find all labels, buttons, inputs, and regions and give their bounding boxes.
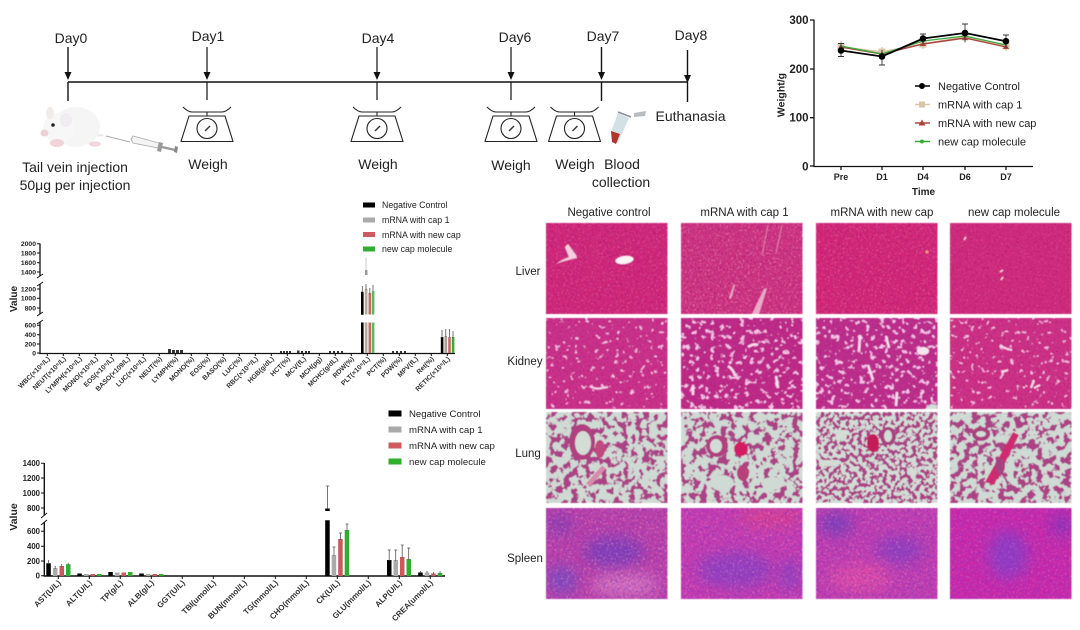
x tick labels: GLU(mmol/L): [331, 578, 373, 621]
legend: biochemistry: Negative Control: [409, 409, 480, 420]
y tick labels: [23, 459, 41, 580]
y tick labels: 400: [25, 332, 36, 339]
x tick labels: CREA(umol/L): [390, 578, 435, 623]
y tick labels: 200: [25, 342, 36, 348]
column headings: Negative control: [567, 207, 651, 219]
weight y tick labels: [789, 15, 808, 174]
y tick labels: 1600: [21, 260, 36, 267]
label: Weigh Day1: Weigh: [188, 156, 228, 172]
x tick labels: LUC(%): [222, 356, 244, 378]
micrograph: liver mRNA with cap 1: [681, 223, 802, 314]
micrograph: kidney negative control: [546, 318, 668, 409]
timeline axis: [68, 81, 688, 83]
row labels: Spleen: [507, 553, 543, 565]
marker: Day8: [675, 27, 708, 102]
y tick labels: 0: [36, 572, 41, 580]
y axis title: Value: [9, 286, 20, 312]
x tick labels: MCV(fL): [284, 356, 308, 379]
label: blood collection: Blood: [604, 156, 640, 172]
bars: small values: [168, 349, 406, 353]
row labels: Lung: [515, 448, 541, 460]
x tick labels: LYMPH(×10⁹/L): [45, 356, 84, 395]
weight x tick labels: Pre: [834, 172, 848, 182]
legend: blood routine: Negative Control: [382, 200, 448, 210]
weight axes: [810, 20, 1033, 170]
row labels: Kidney: [507, 356, 543, 368]
weight x tick labels: D7: [1000, 172, 1012, 182]
weight y tick labels: 0: [802, 162, 808, 174]
marker: Day4: [362, 30, 395, 100]
micrograph: liver negative control: [546, 223, 668, 314]
x tick labels: BUN(mmol/L): [206, 578, 249, 621]
legend: biochemistry: new cap molecule: [409, 457, 486, 468]
bars: green series: [66, 530, 442, 576]
marker: Day6: Day6: [499, 29, 532, 45]
x tick labels: PLT(×10⁹/L): [340, 356, 372, 387]
legend: weight chart: mRNA with new cap: [938, 118, 1036, 130]
weight x tick labels: [834, 172, 1012, 182]
x tick labels: MPV(fL): [397, 356, 420, 379]
micrograph: lung mRNA with new cap: [816, 412, 938, 503]
x tick labels: BASO(×109/L): [95, 356, 132, 393]
axis ticks: [41, 463, 430, 579]
x tick labels: HCT(%): [270, 356, 292, 378]
legend: weight chart: new cap molecule: [938, 136, 1026, 148]
x tick labels: LYMPH(%): [151, 356, 180, 385]
micrograph: liver mRNA with new cap: [816, 223, 938, 314]
y tick labels: 1000: [23, 489, 41, 498]
x tick labels: TG(mmol/L): [242, 578, 280, 617]
marker: Day0: [55, 30, 88, 101]
axes: [44, 463, 445, 576]
chart: blood biochemistry bar chart: [8, 409, 495, 623]
y tick labels: 600: [27, 527, 41, 536]
panel: experiment timeline: [20, 27, 726, 193]
bars: PLT: [361, 258, 374, 353]
legend: weight chart: [915, 81, 1036, 148]
micrograph: kidney mRNA with new cap: [816, 318, 938, 409]
marker: Day1: [192, 28, 225, 100]
y tick labels: 400: [27, 542, 41, 551]
series: mRNA with cap 1: [838, 31, 1010, 58]
axes: [40, 244, 455, 354]
y tick labels: 1400: [21, 270, 36, 276]
column headings: mRNA with cap 1: [700, 207, 789, 219]
text: injection details: 50μg per injection: [20, 177, 130, 193]
y tick labels: 600: [25, 323, 36, 330]
bars: RETIC: [441, 329, 454, 353]
weight y tick labels: 100: [789, 113, 808, 125]
micrograph: spleen mRNA with cap 1: [681, 508, 802, 599]
x tick labels: MCHC(g/dL): [307, 356, 340, 389]
micrograph: spleen new cap molecule: [950, 508, 1074, 599]
weight x tick labels: D4: [917, 172, 929, 182]
legend: biochemistry: mRNA with new cap: [409, 441, 495, 452]
y tick labels: 1000: [21, 296, 36, 303]
chart: blood routine bar chart: [9, 200, 461, 395]
micrograph: kidney new cap molecule: [950, 318, 1072, 409]
label: blood collection: collection: [592, 174, 650, 190]
micrograph: liver new cap molecule: [950, 223, 1072, 314]
text: injection details: [20, 159, 130, 193]
x tick labels: ALT(U/L): [64, 578, 94, 608]
x tick labels: TBI(umol/L): [180, 578, 218, 616]
legend: weight chart: mRNA with cap 1: [938, 100, 1022, 112]
icon: scale Day7: [548, 107, 600, 142]
x tick labels: BASO(%): [202, 356, 228, 382]
x tick labels: MONO(×10⁹/L): [62, 356, 100, 394]
x tick labels: ALP(U/L): [373, 578, 404, 609]
weight x tick labels: D6: [959, 172, 971, 182]
text: injection details: Tail vein injection: [22, 159, 128, 175]
weight y tick labels: 200: [789, 64, 808, 76]
legend: blood routine: [363, 200, 461, 254]
micrograph: spleen negative control: [546, 508, 668, 599]
micrographs: [546, 223, 1074, 599]
x tick labels: PCT(%): [366, 356, 388, 378]
marker: Day4: Day4: [362, 30, 395, 46]
x tick labels: MONO(%): [168, 356, 196, 383]
x tick labels: NEUT(%): [138, 356, 164, 381]
column headings: mRNA with new cap: [831, 207, 933, 219]
x tick labels: TP(g/L): [99, 578, 125, 604]
bars: gray series: [53, 555, 429, 576]
weight y tick labels: 300: [789, 15, 808, 27]
panel: histology grid: [507, 207, 1074, 599]
marker: Day0: Day0: [55, 30, 88, 46]
series: Negative Control: [838, 24, 1009, 65]
y tick labels: 1200: [21, 286, 36, 294]
chart: body weight line chart: [776, 15, 1036, 198]
label: euthanasia: Euthanasia: [656, 108, 726, 124]
legend: blood routine: mRNA with cap 1: [382, 215, 450, 225]
x tick labels: ALB(g/L): [126, 578, 156, 609]
micrograph: kidney mRNA with cap 1: [681, 318, 802, 409]
column headings: [567, 207, 1060, 219]
y tick labels: [21, 241, 36, 358]
icon: scale Day4: [351, 107, 403, 142]
x tick labels: [17, 356, 452, 395]
legend: biochemistry: mRNA with cap 1: [409, 425, 483, 436]
marker: Day1: Day1: [192, 28, 225, 44]
y tick labels: 1400: [23, 459, 41, 468]
series: new cap molecule: [841, 36, 1006, 54]
column headings: new cap molecule: [968, 207, 1060, 219]
error bars: [48, 486, 440, 574]
micrograph: lung new cap molecule: [950, 412, 1072, 503]
icon: blood tube: [611, 111, 646, 144]
legend: weight chart: Negative Control: [938, 81, 1020, 93]
row labels: [507, 266, 543, 565]
x tick labels: EOS(%): [189, 356, 212, 378]
x tick labels: CHO(mmol/L): [268, 578, 311, 621]
legend: blood routine: new cap molecule: [382, 244, 453, 254]
x tick labels: NEUT(×10⁹/L): [32, 356, 68, 392]
x tick labels: Ret(%): [416, 356, 436, 376]
label: Weigh Day4: Weigh: [358, 156, 398, 172]
x tick labels: RETIC(×10⁹/L): [415, 356, 452, 393]
marker: Day8: Day8: [675, 27, 708, 43]
icon: scale Day6: [485, 107, 537, 142]
micrograph: spleen mRNA with new cap: [816, 508, 938, 599]
icon: mouse: [40, 107, 103, 147]
weight x tick labels: D1: [876, 172, 888, 182]
x tick labels: RDW(%): [332, 356, 356, 380]
marker: Day7: Day7: [587, 28, 620, 44]
x tick labels: HGB(g/dL): [247, 356, 276, 385]
y tick labels: 800: [25, 306, 36, 312]
series: mRNA with new cap: [838, 35, 1009, 56]
y tick labels: 1200: [23, 474, 41, 483]
y tick labels: 0: [32, 350, 36, 358]
x tick labels: PDW(%): [380, 356, 404, 380]
row labels: Liver: [516, 266, 541, 278]
x tick labels: CK(U/L): [314, 578, 342, 606]
icon: scale Day1: [181, 107, 233, 142]
label: Weigh Day7: Weigh: [555, 156, 595, 172]
weight x axis title: Time: [912, 187, 936, 198]
label: Weigh Day6: Weigh: [491, 157, 531, 173]
marker: Day7: [587, 28, 620, 101]
legend: biochemistry: [388, 409, 495, 468]
y tick labels: 1800: [21, 250, 36, 258]
label: blood collection: [592, 156, 650, 190]
bars: black series: [46, 508, 423, 576]
y tick labels: 800: [27, 504, 41, 513]
bars: red series: [60, 539, 436, 576]
x tick labels: WBC(×10⁹/L): [17, 356, 52, 390]
y tick labels: 200: [27, 557, 41, 566]
x tick labels: GGT(U/L): [155, 578, 187, 610]
weight y axis title: Weight/g: [776, 73, 788, 117]
x tick labels: MCH(pg): [299, 356, 324, 381]
x tick labels: AST(U/L): [32, 578, 63, 609]
micrograph: lung negative control: [546, 412, 668, 503]
marker: Day6: [499, 29, 532, 100]
x tick labels: EOS(×10⁹/L): [83, 356, 116, 389]
icon: syringe: [106, 136, 178, 153]
y axis title: Value: [8, 503, 20, 531]
legend: blood routine: mRNA with new cap: [382, 230, 461, 240]
x tick labels: RBC(×10¹²/L): [226, 356, 260, 390]
x tick labels: LUC(×10⁹/L): [115, 356, 148, 389]
y tick labels: 2000: [21, 241, 36, 248]
x tick labels: [32, 578, 435, 623]
micrograph: lung mRNA with cap 1: [681, 412, 802, 503]
axis ticks: [37, 244, 447, 356]
